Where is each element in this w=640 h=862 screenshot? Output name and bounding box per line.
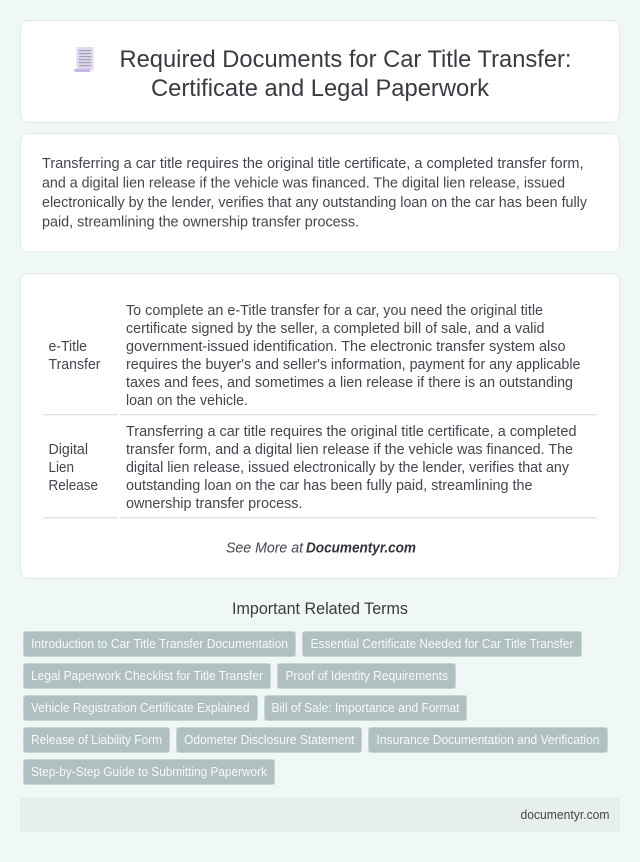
label: e-Title Transfer (48, 339, 101, 373)
heading: Important Related Terms: Important Related Terms (232, 600, 408, 618)
text block: introduction (42, 156, 588, 230)
text block: Digital Lien Release description (126, 424, 576, 512)
title: Certificate and Legal Paperwork (151, 75, 490, 102)
text block: introduction: electronically by the lender, verifies that any outstanding loan on the car has been fully (42, 195, 588, 211)
text block: e-Title description: requires the buyer's and seller's information, payment for any applicable (126, 357, 580, 373)
tag: Legal Paperwork Checklist for Title Transfer (31, 668, 264, 683)
text block: Digital Lien Release description: digital lien release, issued electronically by the lender, verifies that any (126, 460, 570, 476)
text block: e-Title description: certificate signed by the seller, a completed bill of sale, and a valid (126, 321, 544, 337)
tag: Odometer Disclosure Statement (184, 732, 355, 747)
text block: introduction: paid, streamlining the ownership transfer process. (42, 214, 359, 230)
tag (302, 632, 582, 656)
see more link: Documentyr.com (306, 541, 416, 557)
text block: e-Title description (126, 303, 580, 409)
label: Digital Lien Release: Lien (48, 460, 74, 476)
text block: e-Title description: loan on the vehicle. (126, 393, 248, 409)
tag: Insurance Documentation and Verification (376, 732, 600, 747)
footer (20, 798, 620, 832)
tag (278, 664, 456, 688)
label: Digital Lien Release: Digital (48, 442, 88, 458)
label: e-Title Transfer: Transfer (48, 357, 101, 373)
text block: Digital Lien Release description: ownership transfer process. (126, 496, 302, 512)
tag: Release of Liability Form (31, 732, 162, 747)
tag: Introduction to Car Title Transfer Documentation (31, 636, 288, 651)
see more link (226, 541, 416, 557)
tag (176, 728, 362, 752)
tag (368, 728, 608, 752)
title: Required Documents for Car Title Transfer: (120, 46, 572, 73)
text block: Digital Lien Release description: transfer form, and a digital lien release if the vehicle was financed. The (126, 442, 573, 458)
tag (264, 696, 466, 720)
text block: introduction: and a digital lien release if the vehicle was financed. The digital lien release, issued (42, 176, 565, 192)
panel: introduction (20, 134, 620, 252)
related terms tags (24, 632, 608, 784)
tag (24, 632, 296, 656)
tag (24, 728, 170, 752)
text block: Digital Lien Release description: Transferring a car title requires the original title certificate, a completed (126, 424, 576, 440)
label: Digital Lien Release: Release (48, 478, 98, 494)
panel: title header (20, 20, 620, 122)
tag: Step-by-Step Guide to Submitting Paperwork (31, 764, 267, 779)
label: Digital Lien Release (48, 442, 98, 494)
see more link: See More at (226, 541, 304, 557)
icon: document scroll (74, 47, 94, 72)
text block: e-Title description: taxes and fees, and sometimes a lien release if there is an outstanding (126, 375, 573, 391)
label: e-Title Transfer: e-Title (48, 339, 87, 355)
text block: e-Title description: To complete an e-Title transfer for a car, you need the original title (126, 303, 543, 319)
tag: Bill of Sale: Importance and Format (272, 700, 460, 715)
panel: document table (20, 274, 620, 578)
tag (24, 760, 274, 784)
table row: e-Title Transfer (48, 303, 580, 409)
text block: Digital Lien Release description: outstanding loan on the car has been fully paid, streamlining the (126, 478, 532, 494)
title (120, 46, 572, 102)
text block: introduction: Transferring a car title requires the original title certificate, a completed transfer form, (42, 156, 584, 172)
text block: e-Title description: government-issued identification. The electronic transfer system also (126, 339, 566, 355)
footer: documentyr.com (520, 807, 610, 822)
tag (24, 696, 258, 720)
tag (24, 664, 270, 688)
tag: Proof of Identity Requirements (286, 668, 448, 683)
tag: Vehicle Registration Certificate Explained (31, 700, 250, 715)
table row: Digital Lien Release (48, 424, 576, 512)
tag: Essential Certificate Needed for Car Title Transfer (310, 636, 574, 651)
